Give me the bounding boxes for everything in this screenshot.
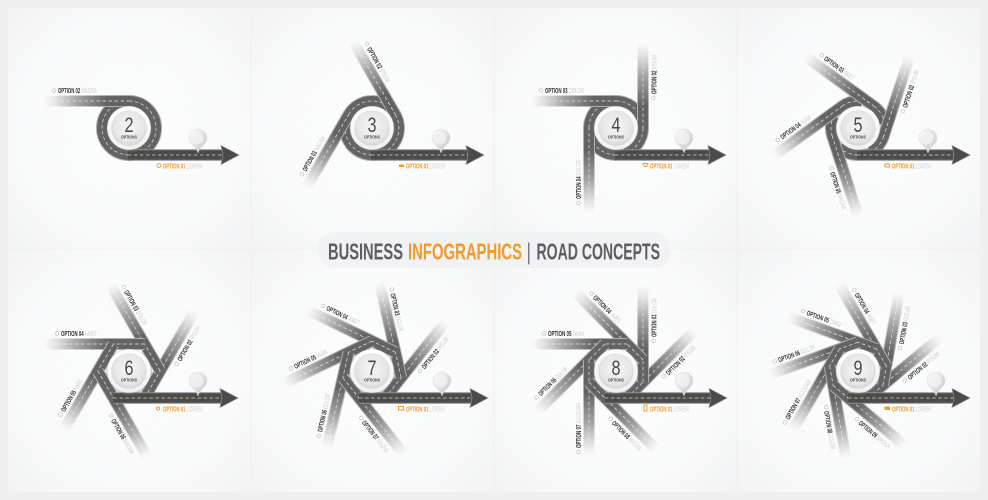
- road: option 06: OPTION 06 DOLOR: [778, 344, 817, 364]
- hub: 7: [368, 357, 376, 380]
- hub: OPTIONS: [364, 134, 380, 140]
- road: option 08: [578, 382, 657, 461]
- hub: 4: [612, 114, 621, 137]
- title banner: BUSINESS: [328, 238, 403, 264]
- arrow: option 01: [615, 146, 726, 164]
- road: option 06: [528, 335, 605, 412]
- label: option 01: OPTION 01 LOREM: [650, 406, 689, 414]
- panel: 2 options background: [8, 8, 250, 248]
- road: option 09: [823, 385, 906, 458]
- road: option 04: [44, 331, 145, 344]
- hub: 9: [854, 357, 862, 380]
- arrow: option 01: [113, 388, 238, 408]
- road: option 02: [44, 88, 130, 101]
- label: option 01: [644, 405, 689, 414]
- road: option 07: OPTION 07 ALIQUAM: [785, 379, 813, 421]
- road: option 07: [781, 343, 840, 431]
- diagram: 3 options: [295, 34, 484, 188]
- hub: OPTIONS: [608, 378, 624, 382]
- road: option 03: [643, 286, 658, 382]
- label: option 01: OPTION 01 LOREM: [406, 406, 445, 414]
- road: option 03: [110, 277, 171, 371]
- label: option 01: OPTION 01 LOREM: [163, 406, 202, 414]
- pin: [432, 129, 450, 153]
- hub: 5: [854, 114, 862, 137]
- hub: 8: [612, 357, 620, 380]
- diagram: 9 options: [764, 277, 970, 462]
- hub: [835, 106, 881, 152]
- road: option 08: [814, 366, 846, 462]
- road: option 03: OPTION 03 DOLOR: [899, 305, 913, 345]
- road: option 05: OPTION 05 NIAM: [293, 349, 329, 371]
- road: option 02: [868, 337, 950, 410]
- road: option 03: OPTION 03 DOLOR: [122, 290, 148, 327]
- road: option 02: [627, 330, 706, 409]
- hub: OPTIONS: [608, 134, 624, 140]
- panel: 4 options background: [494, 8, 736, 248]
- road: option 05: [52, 337, 113, 431]
- hub: 6: [124, 357, 134, 380]
- road: option 06: OPTION 06 DOLOR: [538, 365, 570, 398]
- hub: [593, 349, 639, 395]
- hub: OPTIONS: [121, 134, 137, 140]
- road: option 07: OPTION 07 ALIQUAM: [576, 403, 583, 448]
- road: option 04: [575, 283, 652, 360]
- road: option 04: [839, 277, 898, 366]
- panel: 7 options background: [252, 250, 494, 492]
- hub: OPTIONS: [850, 134, 866, 140]
- road: option 02: OPTION 02 IPSUM: [665, 344, 698, 377]
- road: option 06: OPTION 06 DOLOR: [317, 393, 333, 433]
- panel: 5 options background: [738, 8, 980, 248]
- label: option 01: OPTION 01 LOREM: [892, 406, 931, 414]
- road: option 03: OPTION 03 DOLOR: [652, 298, 658, 337]
- road: option 04: [307, 298, 401, 352]
- road: option 05: OPTION 05 DIAM: [805, 310, 842, 329]
- hub: OPTIONS: [121, 378, 137, 382]
- road: option 07: OPTION 07 MAGNA: [360, 420, 390, 455]
- label: option 01: OPTION 01 LOREM: [406, 164, 445, 170]
- road: option 04: [576, 127, 589, 213]
- road: option 03: OPTION 03 DOLOR: [545, 88, 584, 95]
- road: option 06: [764, 330, 858, 375]
- title banner: ROAD CONCEPTS: [536, 238, 660, 264]
- title banner: INFOGRAPHICS: [408, 238, 522, 264]
- road: option 02: OPTION 02 IPSUM: [365, 47, 391, 84]
- diagram: 4 options: [531, 43, 726, 213]
- label: option 01: OPTION 01 LOREM: [163, 164, 202, 170]
- title banner: [318, 232, 672, 268]
- title banner: |: [528, 238, 530, 264]
- arrow: option 01: [128, 146, 239, 164]
- diagram: 5 options: [766, 46, 970, 222]
- pin: [919, 129, 937, 153]
- road: option 05: OPTION 05 MAGNA: [828, 171, 847, 211]
- arrow: option 01: [605, 388, 727, 408]
- pin: [927, 372, 945, 396]
- diagram: 7 options: [278, 279, 488, 464]
- arrow: option 01: [857, 146, 970, 164]
- label: option 01: [884, 406, 931, 414]
- hub: 2: [124, 114, 134, 137]
- diagram: 2 options: [44, 88, 239, 170]
- road: option 05: [531, 331, 627, 344]
- road: option 08: OPTION 08 DOLOR: [822, 411, 836, 450]
- road: option 03: OPTION 03 DOLOR: [388, 293, 404, 332]
- diagram: 8 options: [528, 283, 727, 461]
- pin: [675, 129, 693, 153]
- panel: 3 options background: [252, 8, 494, 248]
- road: option 03: [379, 279, 414, 378]
- hub: 3: [368, 114, 376, 137]
- arrow: option 01: [371, 146, 484, 164]
- road: option 07: [576, 360, 589, 456]
- arrow: option 01: [359, 388, 488, 408]
- road: option 05: [278, 329, 372, 384]
- road: option 02: OPTION 02 IPSUM: [177, 325, 202, 363]
- road: option 04: OPTION 04 AMET: [325, 305, 361, 328]
- road: option 05: OPTION 05 NIAM: [548, 331, 584, 338]
- label: option 01: [398, 406, 445, 414]
- road: option 03: OPTION 03 MAGNA: [302, 136, 328, 173]
- hub: [835, 349, 881, 395]
- hub: OPTIONS: [364, 378, 380, 382]
- road: option 02: OPTION 02 IPSUM: [902, 69, 921, 109]
- road: option 02: [353, 34, 407, 115]
- road: option 02: OPTION 02 IPSUM: [907, 351, 941, 382]
- road: option 08: OPTION 08 MAGNA: [610, 420, 643, 453]
- road: option 05: [787, 304, 881, 349]
- hub: [593, 106, 639, 152]
- panel: 6 options background: [8, 250, 250, 492]
- road: option 04: OPTION 04 NIAM: [779, 114, 813, 141]
- pin: [189, 372, 207, 396]
- pin: [433, 372, 451, 396]
- road: option 06: OPTION 06 MAGNA: [109, 418, 135, 456]
- hub: [106, 349, 152, 395]
- road: option 04: OPTION 04 AMET: [61, 331, 97, 338]
- hub: [349, 349, 395, 395]
- pin: [675, 372, 693, 396]
- road: option 04: OPTION 04 AMET: [853, 292, 877, 327]
- road: option 02: OPTION 02 IPSUM: [421, 336, 451, 371]
- road: option 02: [643, 43, 658, 129]
- road: option 03: [883, 292, 915, 388]
- road: option 09: OPTION 09 MAGNA: [857, 420, 891, 451]
- panel: 9 options background: [738, 250, 980, 492]
- label: option 01: OPTION 01 LOREM: [892, 164, 931, 170]
- road: option 03: [531, 88, 617, 101]
- road: option 02: OPTION 02 MAGNA: [58, 88, 97, 95]
- road: option 04: OPTION 04 DOLOR: [576, 160, 583, 199]
- road: option 05: [817, 135, 859, 222]
- label: option 01: OPTION 01 LOREM: [650, 164, 689, 170]
- road: option 05: OPTION 05 NIAM: [60, 379, 84, 413]
- road: option 02: [385, 321, 458, 408]
- road: option 02: OPTION 02 IPSUM: [652, 55, 658, 94]
- panel: 8 options background: [494, 250, 736, 492]
- road: option 04: OPTION 04 AMET: [591, 295, 622, 325]
- road: option 04: [766, 95, 843, 156]
- road: option 02: [883, 56, 925, 142]
- road: option 03: [805, 46, 882, 107]
- arrow: option 01: [848, 388, 970, 408]
- hub: OPTIONS: [850, 378, 866, 382]
- hub: [106, 106, 152, 152]
- road: option 02: [145, 311, 208, 406]
- hub: [349, 106, 395, 152]
- road: option 06: [84, 371, 148, 466]
- pin: [189, 129, 207, 153]
- road: option 03: [295, 107, 349, 188]
- road: option 06: [314, 349, 349, 448]
- road: option 03: OPTION 03 AMET: [822, 56, 856, 83]
- road: option 07: [331, 378, 404, 464]
- diagram: 6 options: [44, 277, 238, 466]
